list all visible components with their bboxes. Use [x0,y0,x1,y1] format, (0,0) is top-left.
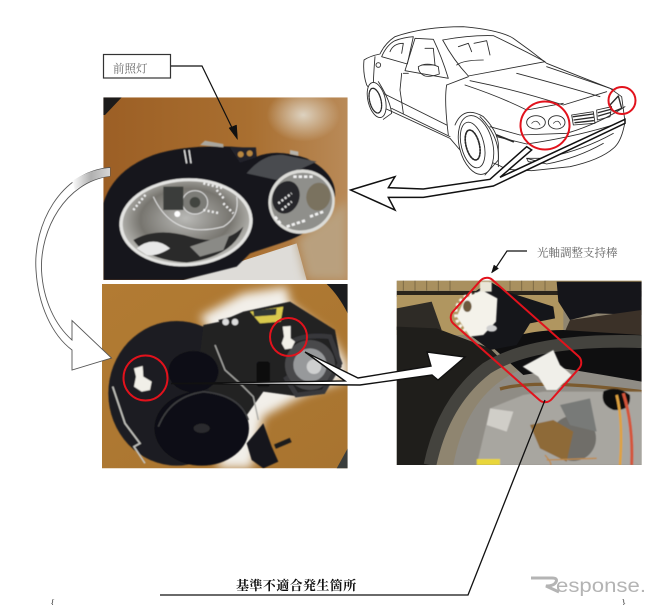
red circle: adjuster on back, left [124,356,168,400]
curved arrow: front photo to back photo [36,168,112,370]
illustration: car line drawing [364,27,625,178]
photo: back of headlamp [102,284,348,468]
photo: front of headlamp [103,88,348,280]
label box: headlamp [104,54,170,78]
red circle: adjuster on back, right [270,318,307,356]
photo: close-up of adjuster rod [397,281,642,465]
arrow: headlamp label to photo [171,66,238,140]
red circle: headlamps on car [520,102,570,150]
arrow: adjuster rod label [492,251,527,273]
arrow: back photo to close-up [171,352,465,385]
arrow: car to headlamp photo [351,119,625,210]
caption: non-conforming location: 基準不適合発生箇所 [236,578,357,593]
leader line: non-conforming location [160,400,545,595]
annotation: adjuster rod name: 光軸調整支持棒 [537,246,618,260]
grey shaft end of curved arrow [72,168,110,190]
watermark: Response logo [531,576,646,597]
watermark: Response logo: esponse. [556,576,646,597]
red circle: side of car [608,87,636,114]
label box: headlamp: 前照灯 [113,62,148,76]
red outline: adjuster rod in close-up [447,274,585,406]
